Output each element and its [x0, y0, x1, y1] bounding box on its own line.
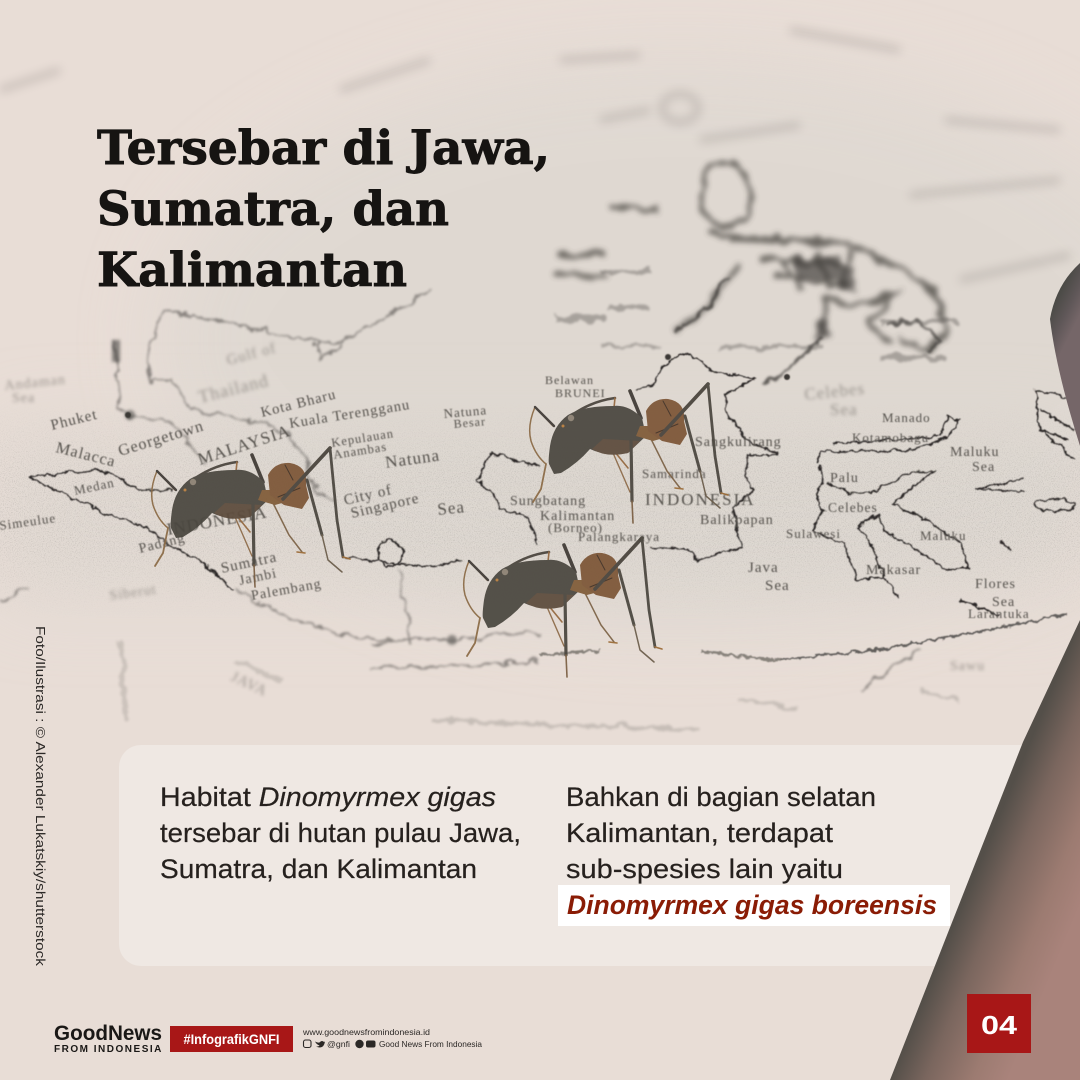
map: place name labels: Kotamobagu — [852, 430, 929, 445]
map: place name labels: Java — [748, 560, 779, 576]
footer logo: GoodNews From Indonesia: FROM INDONESIA — [54, 1044, 162, 1055]
map: place name labels: Phuket — [49, 407, 99, 434]
map: place name labels: Georgetown — [116, 418, 206, 460]
map: place name labels: Anambas — [332, 440, 388, 462]
map: place name labels: Samarinda — [642, 466, 707, 481]
map: blurred far labels: Andaman — [4, 373, 67, 394]
hashtag badge — [170, 1026, 293, 1052]
page number badge — [967, 994, 1031, 1053]
map: place name labels: Natuna — [443, 402, 488, 421]
map: place name labels: Manado — [882, 410, 931, 425]
map: place name labels: Sulawesi — [786, 526, 841, 541]
map: place name labels: Kepulauan — [330, 426, 395, 450]
map: place name labels: Besar — [453, 414, 486, 431]
map: place name labels: Singapore — [349, 491, 421, 522]
map: blurred far labels: Sea — [830, 400, 858, 419]
map: place name labels — [0, 373, 1030, 621]
map: faint far marks — [0, 30, 1070, 280]
map: west coastlines, upper — [0, 290, 960, 730]
icon: youtube — [366, 1040, 376, 1048]
map: place name labels: Palangkaraya — [578, 529, 660, 544]
text block: right column — [566, 782, 876, 884]
map: place name labels: City of — [342, 482, 394, 509]
icon: facebook — [355, 1040, 364, 1048]
title: Tersebar di Jawa, — [97, 121, 550, 176]
hand: thumb — [1050, 263, 1080, 446]
highlight: species name: Dinomyrmex gigas boreensis — [567, 890, 937, 920]
map: place name labels: Sumatra — [220, 549, 279, 577]
map: place name labels: Natuna — [384, 445, 441, 472]
text block: right column: sub-spesies lain yaitu — [566, 854, 843, 884]
map: place name labels: INDONESIA — [645, 490, 756, 509]
map: place name labels: Maluku — [920, 528, 966, 543]
map: sharp central coastlines — [28, 353, 1075, 660]
map: place name labels: Sungbatang — [510, 494, 586, 509]
text block: left column: Sumatra, dan Kalimantan — [160, 854, 477, 884]
hand: forearm — [890, 620, 1080, 1080]
footer website and social links — [302, 1027, 482, 1049]
channel name: Good News From Indonesia — [379, 1039, 482, 1049]
map: place name labels: (Borneo) — [548, 520, 603, 535]
ant: left — [152, 448, 350, 587]
map: place name labels: Palu — [830, 471, 859, 486]
map: blurred far labels: Sawu — [950, 659, 985, 674]
map: blurred far labels: Siberut — [108, 583, 158, 604]
map: place name labels: Sea — [972, 460, 995, 475]
map: place name labels: Larantuka — [968, 606, 1030, 621]
title: Kalimantan — [97, 243, 407, 298]
map: place name labels: Palembang — [250, 577, 323, 604]
map: place name labels: Medan — [73, 475, 116, 498]
map: blurred far labels: Thailand — [196, 370, 271, 407]
hashtag badge: #InfografikGNFI — [184, 1032, 280, 1047]
map: place name labels: Sea — [992, 595, 1015, 610]
icon: instagram — [304, 1040, 311, 1048]
ant: upper right — [530, 384, 728, 523]
map: place name labels: Malacca — [54, 439, 118, 471]
footer logo: GoodNews From Indonesia: GoodNews — [54, 1022, 162, 1045]
text block: left column: Habitat Dinomyrmex gigas — [160, 782, 496, 812]
map: blurred far labels: Gulf of — [225, 340, 278, 369]
map: place name labels: Kuala Terengganu — [288, 397, 411, 432]
ant: lower centre — [464, 538, 662, 677]
map: place name labels: Jambi — [238, 566, 278, 589]
text block: left column — [160, 782, 521, 884]
map: place name labels: Sea — [765, 578, 790, 594]
page number badge: 04 — [981, 1010, 1018, 1040]
footer website and social links: www.goodnewsfromindonesia.id — [302, 1027, 430, 1037]
map: blurred far labels: Celebes — [803, 379, 866, 404]
map: place name labels: Maluku — [950, 445, 1000, 460]
map: place name labels: Sangkulirang — [695, 435, 782, 450]
handle: gnfi: @gnfi — [327, 1039, 350, 1049]
map: blurred Philippines — [555, 163, 945, 350]
map: blurred far labels — [4, 340, 985, 700]
photo credit: Foto/Ilustrasi : © Alexander Lukatskiy/shutterstock — [33, 626, 47, 967]
icon: twitter — [315, 1041, 325, 1048]
map background photo — [0, 26, 1080, 732]
text block: right column: Kalimantan, terdapat — [566, 818, 834, 848]
footer logo: GoodNews From Indonesia — [54, 1022, 162, 1055]
map: place name labels: MALAYSIA — [195, 421, 293, 469]
panel: text card — [119, 745, 1079, 966]
map: blurred far labels: JAVA — [228, 669, 270, 700]
map: place name labels: Kalimantan — [540, 509, 615, 524]
map: place name labels: Belawan — [545, 373, 594, 387]
map: place name labels: INDONESIA — [165, 503, 269, 539]
map: place name labels: Celebes — [828, 500, 878, 515]
title — [97, 121, 550, 298]
map: place name labels: BRUNEI — [555, 386, 606, 400]
text block: right column: Bahkan di bagian selatan — [566, 782, 876, 812]
map: place name labels: Simeulue — [0, 510, 57, 533]
map: place name labels: Padang — [137, 531, 187, 557]
text block: left column: tersebar di hutan pulau Jawa, — [160, 818, 521, 848]
map: blurred far labels: Sea — [12, 391, 35, 406]
map: place name labels: Flores — [975, 577, 1016, 592]
map: place name labels: Balikpapan — [700, 513, 774, 528]
title: Sumatra, dan — [97, 182, 449, 237]
map: place name labels: Makasar — [866, 563, 921, 578]
map: place name labels: Sea — [436, 497, 466, 519]
map: place name labels: Kota Bharu — [259, 387, 338, 421]
